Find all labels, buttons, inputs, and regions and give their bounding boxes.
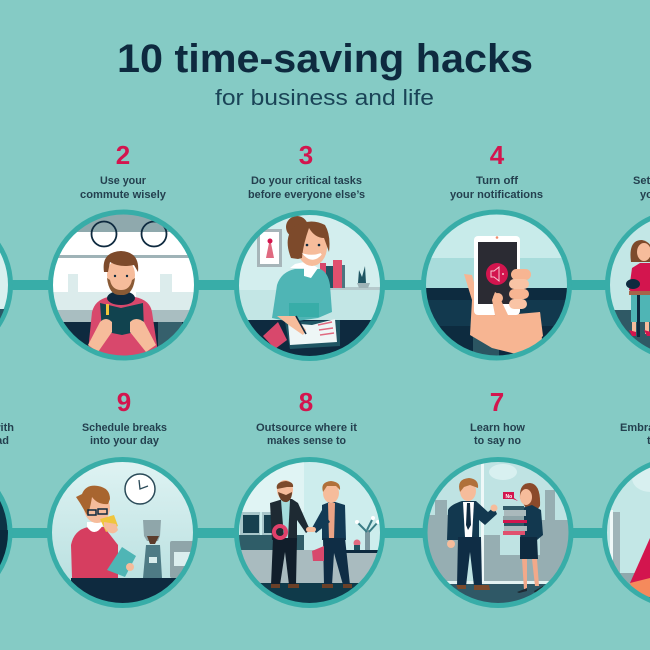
caption 6 — [620, 422, 650, 447]
number 8: 8 — [299, 387, 313, 417]
panel: hack 5 — [605, 176, 650, 354]
circle illustration: coffee break — [50, 460, 196, 613]
caption 3: before everyone else’s — [248, 189, 365, 201]
panel: hack 10 — [0, 423, 14, 574]
circle illustration: two men shaking hands — [234, 460, 386, 611]
circle illustration: hack 10 — [0, 491, 12, 574]
panel: hack 3 — [234, 140, 386, 365]
panel: hack 7 — [420, 387, 576, 614]
caption 4 — [450, 175, 543, 201]
caption 8: Outsource where it — [256, 422, 357, 434]
circle illustration: man and woman with books — [420, 460, 576, 614]
caption 4: your notifications — [450, 189, 543, 201]
caption 2 — [80, 175, 167, 201]
circle illustration: person with city view — [602, 462, 650, 603]
circle illustration: woman writing at desk — [234, 212, 386, 365]
caption 4: Turn off — [476, 175, 518, 187]
caption 8: makes sense to — [267, 435, 346, 447]
circle illustration: man and woman with books: No — [506, 494, 512, 500]
number 7: 7 — [490, 387, 504, 417]
circle illustration: hand holding phone — [420, 212, 572, 368]
panel: hack 2 — [48, 140, 200, 362]
caption 7: Learn how — [470, 422, 525, 434]
caption 10 — [0, 422, 14, 447]
panel: hack 4 — [420, 140, 572, 368]
panel: hack 6 — [602, 423, 650, 603]
number 9: 9 — [117, 387, 131, 417]
caption 7: to say no — [474, 435, 521, 447]
connector line: top row — [0, 280, 650, 290]
title: 10 time-saving hacks — [117, 37, 533, 81]
caption 9: Schedule breaks — [82, 422, 167, 434]
caption 3 — [248, 175, 365, 201]
caption 9: into your day — [90, 435, 160, 447]
panel: hack 1 illustration — [0, 242, 13, 328]
number 3: 3 — [299, 140, 313, 170]
caption 7 — [470, 422, 525, 447]
circle illustration: woman at standing table — [605, 216, 650, 354]
panel: hack 9 — [50, 387, 196, 613]
caption 3: Do your critical tasks — [251, 175, 362, 187]
circle illustration: man reading on a train — [48, 209, 200, 362]
number 2: 2 — [116, 140, 130, 170]
caption 5 — [633, 175, 650, 201]
caption 9 — [82, 422, 167, 447]
caption 2: Use your — [100, 175, 147, 187]
caption 8 — [256, 422, 357, 447]
number 4: 4 — [490, 140, 505, 170]
connector line: bottom row — [0, 528, 650, 538]
caption 2: commute wisely — [80, 189, 167, 201]
panel: hack 8 — [234, 387, 386, 611]
subtitle: for business and life — [215, 85, 434, 110]
